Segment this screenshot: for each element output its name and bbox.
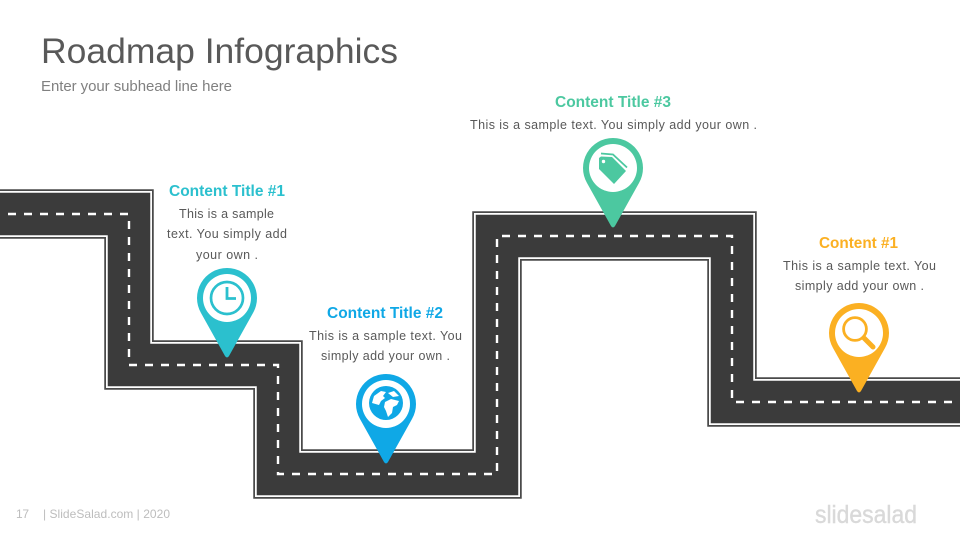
- footer: | SlideSalad.com | 2020: [43, 507, 170, 521]
- text block: content title 2: simply add your own .: [321, 349, 450, 363]
- text block: content title 1: your own .: [196, 248, 258, 262]
- text block: content title 1: [167, 183, 287, 262]
- icon: clock: [211, 282, 243, 314]
- logo: slidesalad: [815, 501, 917, 529]
- text block: content title 2: Content Title #2: [327, 305, 443, 322]
- pin 2: globe: [356, 374, 416, 464]
- text block: content 1: simply add your own .: [795, 279, 924, 293]
- text block: content 1: [783, 235, 936, 293]
- text block: content 1: This is a sample text. You: [783, 259, 936, 273]
- title: Roadmap Infographics: [41, 32, 398, 71]
- text block: content title 3: This is a sample text. You simply add your own .: [470, 118, 757, 132]
- icon: magnifier: [844, 318, 873, 347]
- text block: content title 3: Content Title #3: [555, 94, 671, 111]
- text block: content title 3: [470, 94, 757, 132]
- pin 1: clock: [197, 268, 257, 358]
- pin 4: magnifier: [829, 303, 889, 392]
- pin 3: tag: [583, 138, 643, 228]
- road: [0, 214, 960, 474]
- subhead: Enter your subhead line here: [41, 78, 232, 95]
- icon: globe: [369, 386, 403, 420]
- footer: 17: [16, 507, 29, 521]
- text block: content title 1: text. You simply add: [167, 227, 287, 241]
- text block: content title 1: This is a sample: [179, 207, 274, 221]
- text block: content 1: Content #1: [819, 235, 898, 252]
- text block: content title 2: This is a sample text. You: [309, 329, 462, 343]
- text block: content title 2: [309, 305, 462, 363]
- icon: tag: [599, 154, 627, 184]
- text block: content title 1: Content Title #1: [169, 183, 285, 200]
